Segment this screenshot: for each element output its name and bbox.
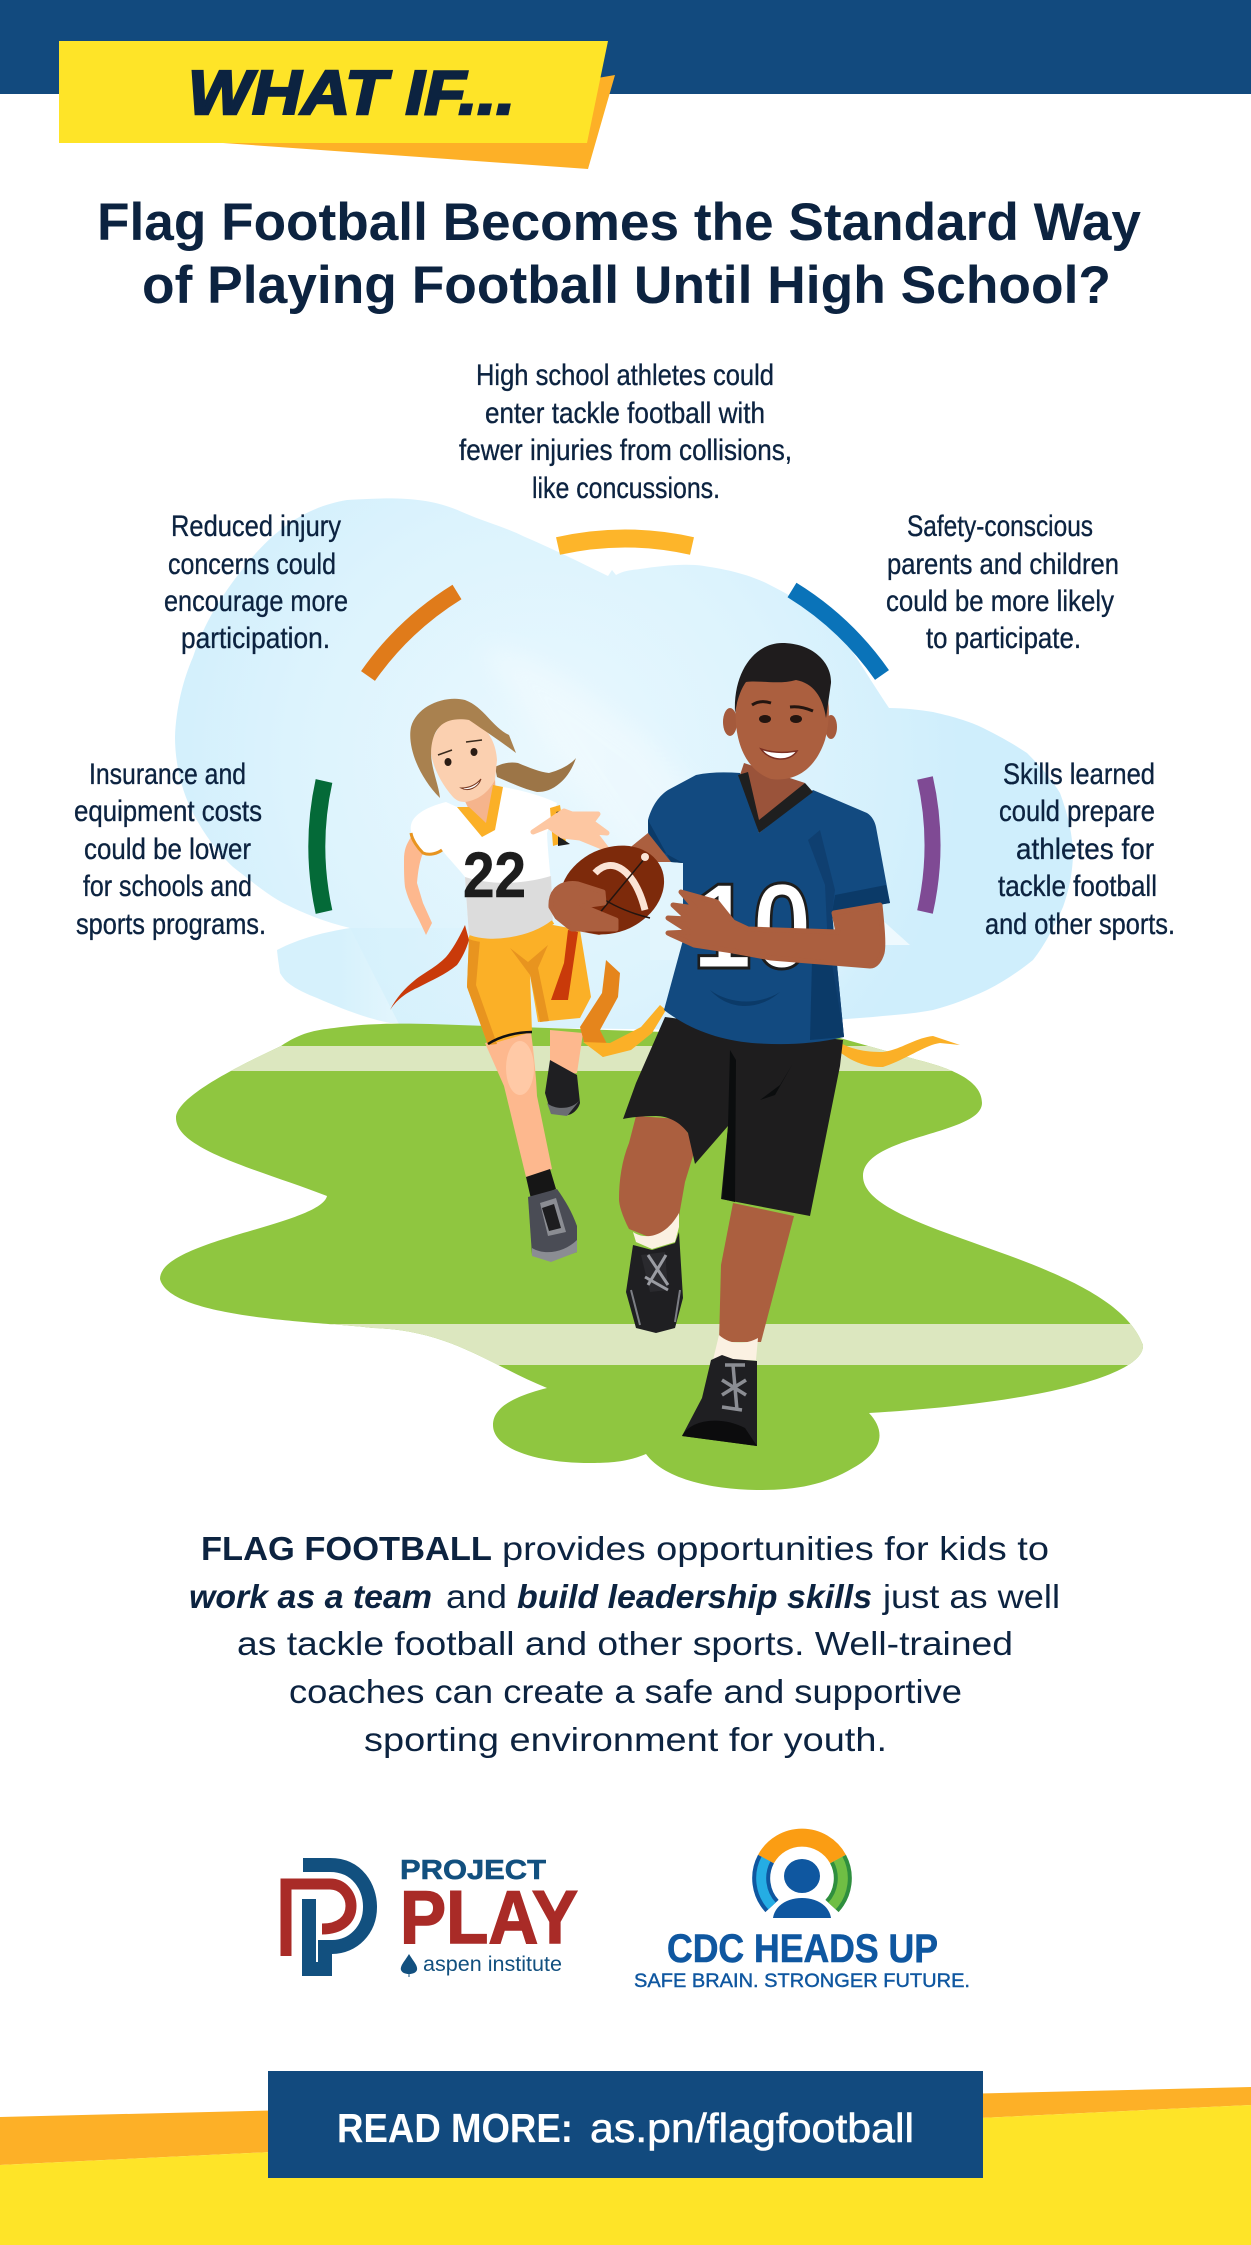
label: upper right benefit: Safety-conscious: [907, 510, 1093, 543]
logo: CDC Heads Up: [634, 1838, 970, 1992]
illustration: boy player: [545, 643, 960, 1446]
label: lower left benefit: sports programs.: [76, 908, 266, 941]
title: Flag Football Becomes the Standard Way: [97, 193, 1142, 252]
paragraph: flag football summary: [189, 1530, 1060, 1758]
blue jersey: [648, 772, 890, 1044]
label: lower right benefit: Skills learned: [1003, 758, 1155, 791]
flags: red: [390, 925, 578, 1010]
label: top benefit: enter tackle football with: [485, 397, 765, 430]
icon: head with ring: [761, 1838, 843, 1918]
ponytail: [495, 758, 576, 792]
label: lower right benefit: [985, 758, 1175, 941]
field: [160, 1024, 1144, 1490]
white jersey: [411, 785, 557, 941]
footer: orange and yellow bands: [0, 2087, 1251, 2245]
logo: Project Play: PLAY: [400, 1875, 578, 1959]
decorative yard lines: [231, 1046, 952, 1071]
label: lower right benefit: could prepare: [999, 795, 1155, 828]
arc: yellow: [558, 539, 692, 546]
label: upper right benefit: parents and children: [887, 548, 1119, 581]
neck: [462, 778, 497, 837]
label: lower right benefit: tackle football: [998, 870, 1157, 903]
header band: [0, 0, 1251, 94]
arc: blue: [792, 590, 882, 675]
jersey number 22: 22: [463, 839, 526, 911]
hand on ball: [551, 884, 616, 929]
facial features: [438, 740, 482, 790]
banner: WHAT IF: [59, 41, 615, 169]
raised leg: [619, 1116, 696, 1333]
left arm: [404, 837, 432, 935]
paragraph: flag football summary: sporting environment for youth.: [364, 1721, 887, 1758]
logo: Project Play: aspen institute: [423, 1953, 562, 1976]
standing leg: [682, 1203, 794, 1446]
logo: CDC Heads Up: SAFE BRAIN. STRONGER FUTURE.: [634, 1971, 970, 1992]
jersey number 10: 10: [692, 858, 812, 994]
paragraph: flag football summary: FLAG FOOTBALL: [201, 1530, 492, 1567]
label: top benefit: like concussions.: [532, 472, 720, 505]
label: top benefit: [459, 359, 792, 505]
label: upper left benefit: participation.: [181, 622, 330, 655]
front leg and shoe: [485, 1032, 577, 1262]
neck: [740, 763, 805, 830]
back leg and shoe: [545, 1030, 583, 1116]
icon: aspen leaf: [401, 1954, 417, 1977]
arc: orange: [368, 592, 457, 676]
paragraph: flag football summary: as tackle football and other sports. Well-trained: [237, 1625, 1013, 1662]
label: upper right benefit: [886, 510, 1119, 655]
right flag: [830, 1036, 960, 1067]
forearm and hand: [668, 892, 883, 966]
arc: green: [317, 781, 324, 912]
left flag: [583, 1005, 666, 1057]
paragraph: flag football summary: and: [446, 1578, 507, 1615]
arm with ball: [549, 833, 671, 935]
label: top benefit: High school athletes could: [476, 359, 774, 392]
label: lower left benefit: Insurance and: [89, 758, 246, 791]
label: lower left benefit: equipment costs: [74, 795, 262, 828]
call to action: read more: READ MORE:: [337, 2105, 573, 2151]
label: upper left benefit: encourage more: [164, 585, 348, 618]
label: upper right benefit: to participate.: [926, 622, 1081, 655]
label: top benefit: fewer injuries from collisions,: [459, 434, 792, 467]
title: [97, 193, 1142, 315]
banner: WHAT IF: WHAT IF...: [188, 59, 515, 128]
arc: purple: [925, 778, 932, 912]
label: lower left benefit: for schools and: [83, 870, 252, 903]
logo: Project Play: [286, 1854, 578, 1977]
face: [430, 719, 497, 802]
reaching hand: [533, 805, 607, 849]
paragraph: flag football summary: provides opportunities for kids to: [502, 1530, 1049, 1567]
label: lower right benefit: and other sports.: [985, 908, 1175, 941]
facial features: [752, 702, 813, 759]
label: lower left benefit: could be lower: [84, 833, 251, 866]
hair: [410, 699, 516, 798]
icon: PP monogram: [286, 1865, 370, 1969]
paragraph: flag football summary: work as a team: [189, 1578, 432, 1615]
logo: CDC Heads Up: CDC HEADS UP: [667, 1927, 938, 1971]
paragraph: flag football summary: build leadership skills: [517, 1578, 872, 1615]
head: [723, 643, 837, 779]
paragraph: flag football summary: just as well: [882, 1578, 1060, 1615]
black shorts: [623, 1017, 843, 1216]
hair: [735, 643, 831, 718]
label: lower right benefit: athletes for: [1016, 833, 1154, 866]
label: upper left benefit: [164, 510, 348, 655]
logo: Project Play: PROJECT: [400, 1854, 546, 1885]
call to action: read more: as.pn/flagfootball: [590, 2105, 914, 2151]
title: of Playing Football Until High School?: [142, 256, 1111, 315]
label: upper right benefit: could be more likely: [886, 585, 1114, 618]
boy's flag: orange: [580, 960, 620, 1057]
paragraph: flag football summary: coaches can create a safe and supportive: [289, 1673, 962, 1710]
football: [545, 829, 679, 951]
call to action: read more: [268, 2071, 983, 2178]
label: upper left benefit: Reduced injury: [171, 510, 341, 543]
illustration: girl player: [390, 699, 620, 1262]
label: upper left benefit: concerns could: [168, 548, 336, 581]
label: lower left benefit: [74, 758, 266, 941]
shorts: [467, 925, 591, 1045]
sky cloud backdrop: [175, 498, 1073, 1040]
